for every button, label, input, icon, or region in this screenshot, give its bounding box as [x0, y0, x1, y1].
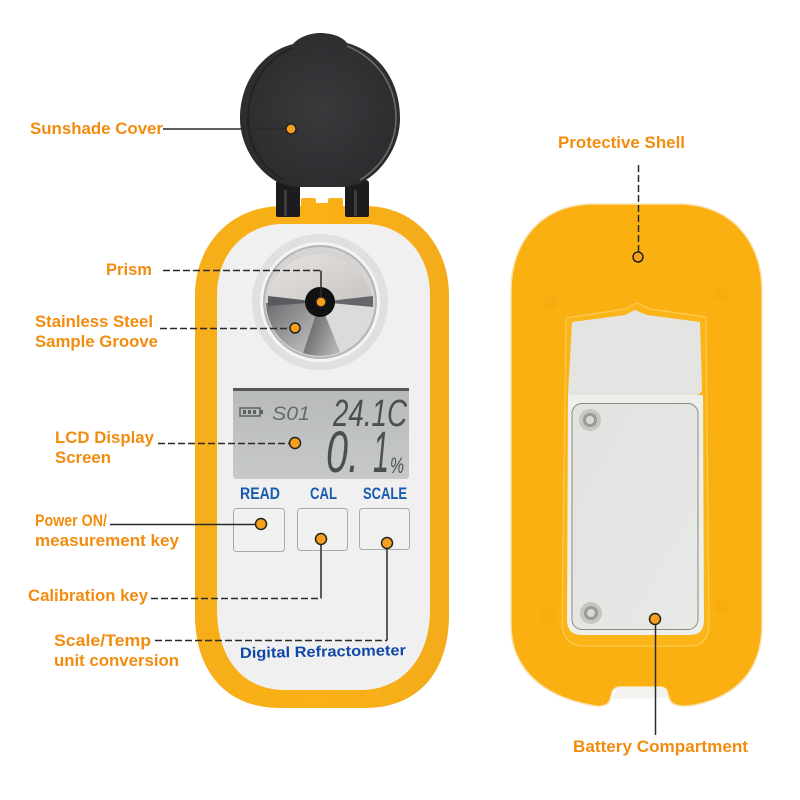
callout: Protective Shell: Protective Shell — [558, 133, 685, 152]
callout: Sunshade Cover: Sunshade Cover — [30, 119, 163, 138]
callout: LCD Display Screen — [55, 428, 300, 467]
callout: Power ON/measurement key: measurement key — [35, 531, 180, 550]
white face — [217, 224, 430, 690]
battery compartment cover — [572, 404, 698, 630]
callout: Battery Compartment — [573, 614, 748, 756]
percent sign: % — [390, 453, 404, 478]
sample number: S01 — [272, 404, 310, 425]
SCALE button — [360, 508, 410, 550]
back panel upper — [568, 310, 702, 395]
callout: Power ON/measurement key: Power ON/ — [35, 511, 107, 530]
callout: Stainless Steel Sample Groove: Sample Groove — [35, 332, 158, 351]
shell mounting bumps — [540, 286, 730, 623]
icon: upper screw — [579, 409, 601, 431]
key label READ: READ — [240, 485, 280, 503]
callout: Calibration key — [28, 534, 326, 605]
callout: LCD Display Screen: LCD Display — [55, 428, 155, 447]
inner rim — [562, 303, 709, 646]
callout: Protective Shell — [558, 133, 685, 262]
yellow bumper — [195, 198, 449, 708]
temperature reading: 24.1C — [332, 393, 407, 435]
key label CAL: CAL — [310, 485, 337, 503]
callout: Scale/Temp unit conversion: unit conversion — [54, 651, 179, 670]
sunshade cover hinges — [276, 180, 369, 218]
callout: Scale/Temp unit conversion — [54, 538, 392, 670]
brand text: Digital Refractometer — [240, 642, 406, 662]
key label SCALE: SCALE — [363, 485, 407, 503]
callout: Power ON/measurement key — [35, 511, 266, 550]
sunshade cover — [240, 33, 400, 187]
bottom notch — [612, 687, 668, 699]
callout: Scale/Temp unit conversion: Scale/Temp — [54, 631, 151, 650]
icon: battery — [240, 408, 263, 416]
callout: LCD Display Screen: Screen — [55, 448, 111, 467]
LCD screen: 1 — [373, 420, 389, 485]
callout: Calibration key: Calibration key — [28, 586, 149, 605]
hinge feet — [276, 190, 369, 217]
callout: Sunshade Cover — [30, 119, 296, 138]
device back: protective shell — [511, 204, 762, 706]
icon: lower screw — [580, 602, 602, 624]
callout: Stainless Steel Sample Groove — [35, 312, 300, 351]
callout: Prism — [106, 260, 326, 307]
LCD screen — [233, 388, 409, 485]
callout: Prism: Prism — [106, 260, 152, 279]
callout: Battery Compartment: Battery Compartment — [573, 737, 748, 756]
READ button — [234, 508, 284, 552]
device front: digital refractometer — [195, 33, 449, 708]
CAL button — [298, 508, 348, 550]
callout: Stainless Steel Sample Groove: Stainless Steel — [35, 312, 153, 331]
main reading: 0. — [326, 420, 359, 485]
prism assembly — [252, 234, 388, 370]
stainless steel groove — [266, 255, 374, 356]
back panel lower — [567, 395, 704, 635]
